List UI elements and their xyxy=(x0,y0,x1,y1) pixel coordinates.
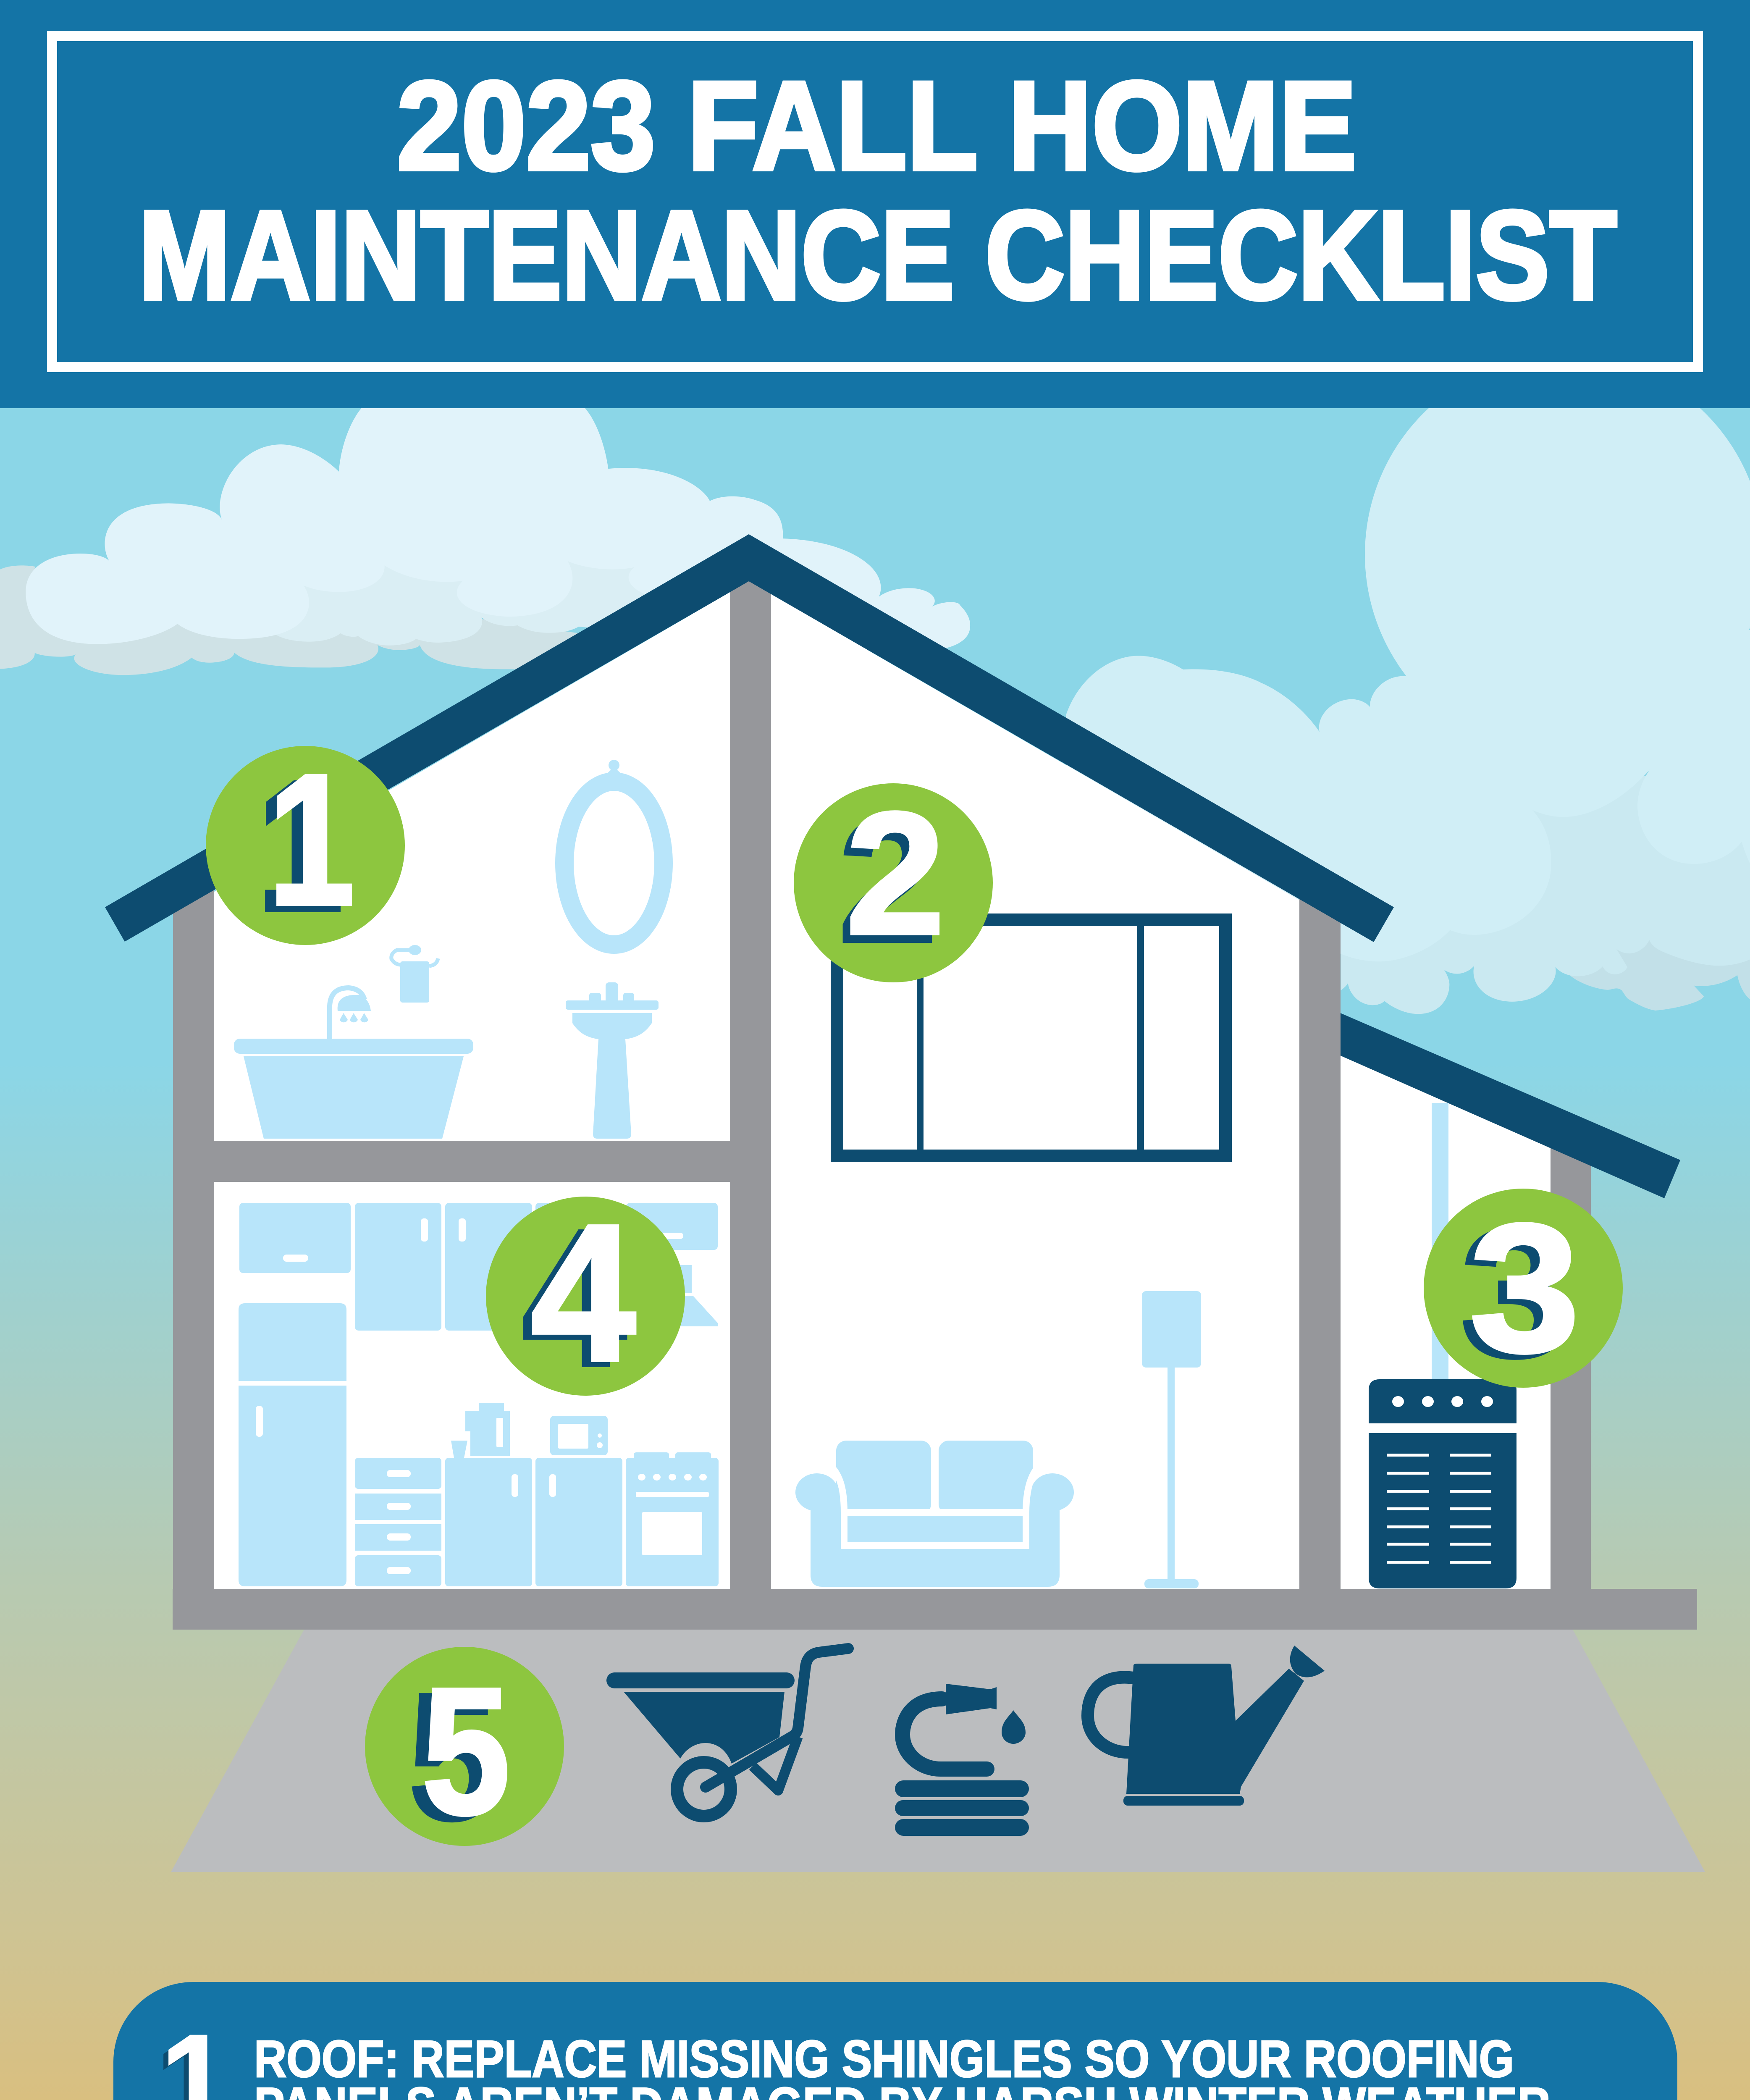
yard ground xyxy=(171,1630,1705,1872)
numbered badge 1: 1 xyxy=(268,735,355,944)
title xyxy=(139,55,1617,326)
header band xyxy=(0,0,1750,408)
numbered badge 4 xyxy=(486,1184,685,1407)
numbered badge 4: 4 xyxy=(522,1189,628,1407)
far right wall xyxy=(1551,1134,1591,1617)
numbered badge 1: 1 xyxy=(257,742,344,950)
numbered badge 5: 5 xyxy=(409,1656,497,1858)
icon: wheelbarrow xyxy=(606,1648,848,1816)
panel: checklist xyxy=(113,1982,1677,2100)
side room interior xyxy=(1323,1042,1566,1589)
numbered badge 5: 5 xyxy=(422,1651,510,1852)
item 1: roof xyxy=(156,2007,1563,2100)
icon: bathtub with shower xyxy=(234,945,473,1139)
icon: sofa xyxy=(795,1441,1074,1587)
side room roof xyxy=(1323,1005,1680,1198)
numbered badge 3 xyxy=(1424,1186,1623,1395)
numbered badge 5 xyxy=(365,1647,564,1858)
icon: kitchen xyxy=(239,1203,719,1586)
icon: garden hose xyxy=(895,1684,1029,1836)
numbered badge 2 xyxy=(794,776,993,982)
numbered badge 3: 3 xyxy=(1460,1191,1571,1395)
numbered badge 3: 3 xyxy=(1469,1186,1580,1390)
icon: pedestal sink xyxy=(566,982,659,1139)
cloud: left xyxy=(0,408,970,675)
numbered badge 2: 2 xyxy=(838,783,937,978)
main roof xyxy=(105,534,1394,942)
icon: furnace and duct xyxy=(1369,1103,1516,1588)
icon: mirror xyxy=(564,760,664,945)
icon: window xyxy=(837,920,1225,1156)
main house interior xyxy=(173,581,1341,1589)
house xyxy=(105,534,1697,1630)
walls and floors xyxy=(173,567,1697,1630)
cloud: right xyxy=(1066,355,1750,1014)
icon: watering can xyxy=(1088,1646,1325,1806)
numbered badge 2: 2 xyxy=(846,776,945,971)
numbered badge 4: 4 xyxy=(531,1184,637,1402)
item 1: roof: ROOF: REPLACE MISSING SHINGLES SO YOUR ROOFING xyxy=(254,2030,1514,2088)
numbered badge 1 xyxy=(206,735,405,950)
icon: floor lamp xyxy=(1142,1291,1201,1588)
title: 2023 FALL HOME xyxy=(397,55,1356,196)
